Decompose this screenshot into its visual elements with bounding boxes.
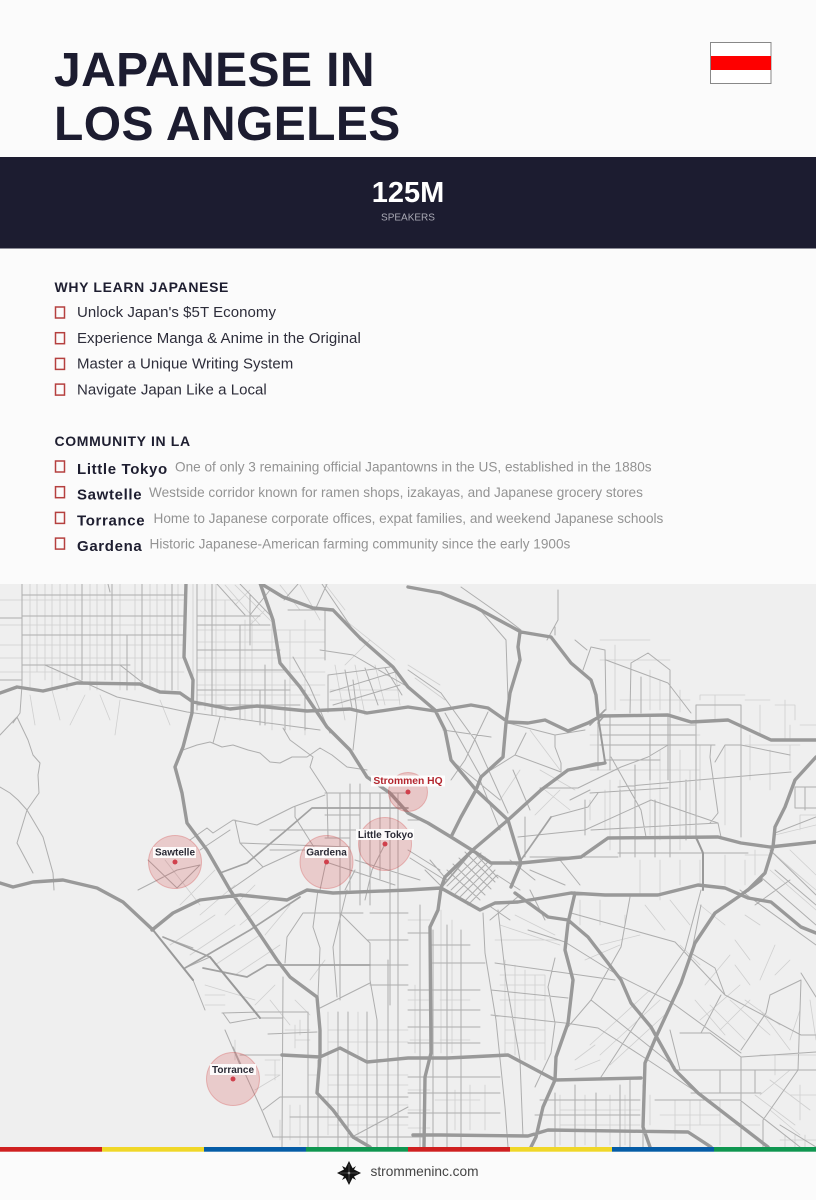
community: Sawtelle: Sawtelle <box>77 487 142 504</box>
community: Torrance: Home to Japanese corporate offices, expat families, and weekend Japanese schools <box>154 511 664 526</box>
community: Sawtelle <box>56 485 643 504</box>
community: Little Tokyo: One of only 3 remaining official Japantowns in the US, established in the 1880s <box>175 460 652 474</box>
map: Los Angeles street map <box>0 583 816 1147</box>
list item: manga and anime: Experience Manga & Anime in the Original <box>77 330 361 347</box>
marker: Strommen HQ <box>371 772 445 812</box>
community: Little Tokyo <box>56 460 652 478</box>
faint local streets <box>0 584 816 1147</box>
marker: Gardena: Gardena <box>306 848 347 858</box>
downtown diagonal grid <box>408 850 580 920</box>
stat band: speakers <box>0 157 816 248</box>
color strip <box>0 1147 816 1152</box>
community: Gardena: Historic Japanese-American farming community since the early 1900s <box>150 537 571 552</box>
marker: Torrance <box>206 1052 260 1106</box>
community: Sawtelle: Westside corridor known for ramen shops, izakayas, and Japanese grocery stores <box>149 485 643 500</box>
arterial roads <box>163 710 605 1018</box>
title: JAPANESE IN <box>54 44 375 97</box>
marker: Sawtelle <box>148 836 202 888</box>
marker: Sawtelle: Sawtelle <box>155 848 195 858</box>
icon: Japan flag <box>710 42 771 84</box>
community: Gardena: Gardena <box>77 538 142 555</box>
community: Little Tokyo: Little Tokyo <box>77 461 168 478</box>
marker: Gardena <box>300 836 353 888</box>
thin streets <box>0 584 816 1147</box>
title: LOS ANGELES <box>54 98 401 151</box>
panel: why learn Japanese <box>54 279 361 398</box>
marker: Torrance: Torrance <box>212 1065 254 1076</box>
heading: why learn Japanese: WHY LEARN JAPANESE <box>54 279 229 295</box>
community: Gardena <box>56 537 571 555</box>
marker: Strommen HQ: Strommen HQ <box>373 776 443 787</box>
marker: Little Tokyo: Little Tokyo <box>358 830 413 841</box>
list item: economy: Unlock Japan's $5T Economy <box>77 304 276 321</box>
community: Torrance <box>56 511 664 529</box>
list item: navigate Japan: Navigate Japan Like a Local <box>77 381 267 398</box>
stat label: SPEAKERS <box>381 212 435 224</box>
marker: Little Tokyo <box>356 818 414 870</box>
community: Torrance: Torrance <box>77 512 145 529</box>
panel: community in LA <box>54 433 664 555</box>
footer website: strommeninc.com <box>370 1164 479 1179</box>
stat value: 125M <box>372 177 444 209</box>
footer logo <box>337 1161 361 1185</box>
list item: writing system: Master a Unique Writing System <box>77 356 293 373</box>
heading: community in LA: COMMUNITY IN LA <box>54 433 191 449</box>
freeways <box>0 583 816 1147</box>
title <box>54 44 401 151</box>
